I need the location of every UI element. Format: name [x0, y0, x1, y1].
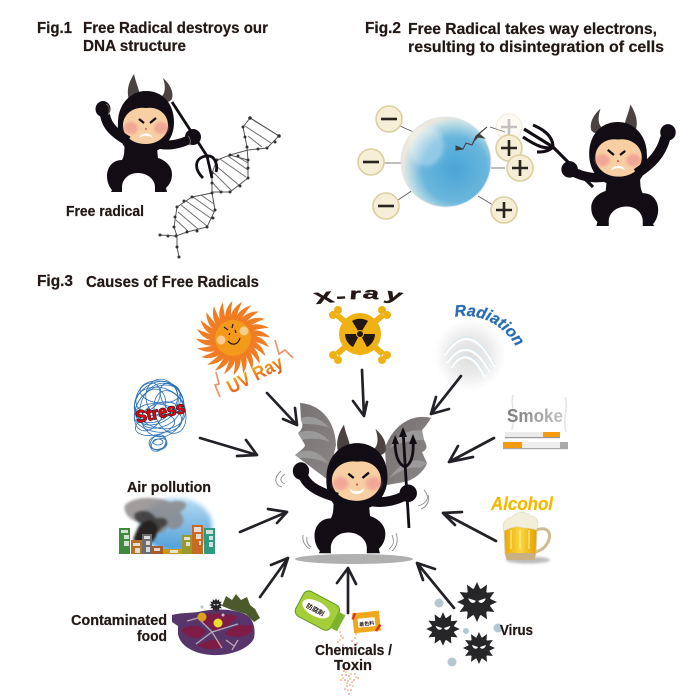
arrow: stress to devil — [200, 438, 257, 456]
label: Stress: Stress — [134, 398, 187, 427]
arrow: alcohol to devil — [443, 512, 496, 541]
motion lines — [276, 471, 429, 551]
heading: Fig.2 — [365, 20, 664, 56]
preservative bottle: 防腐剤 — [305, 601, 327, 618]
cell crack — [456, 127, 487, 150]
negative charges — [358, 106, 402, 219]
icon: chemicals — [293, 589, 392, 695]
heading: Fig.2: Free Radical takes way electrons, — [408, 21, 657, 38]
label: UV Ray: UV Ray — [224, 352, 287, 398]
arrow: food to devil — [260, 558, 288, 597]
shadow — [295, 554, 413, 564]
additive sachet: 着色料 — [359, 620, 375, 628]
icon: UV sun — [196, 301, 293, 398]
arrow: chemicals to devil — [337, 568, 356, 613]
label: Contaminated food — [71, 613, 167, 645]
character: central winged devil — [276, 403, 431, 564]
heading: Fig.2: Fig.2 — [365, 20, 401, 37]
label: Smoke: Smoke — [507, 405, 563, 426]
heading: Fig.1: DNA structure — [83, 38, 186, 55]
heading: Fig.3: Causes of Free Radicals — [86, 274, 259, 291]
icon: stress scribble — [126, 373, 192, 454]
contaminant microbes — [197, 598, 224, 628]
diagram: cell with electrons — [358, 106, 533, 223]
label: Chemicals / Toxin: Chemicals / — [315, 643, 392, 659]
smoke clouds — [125, 498, 186, 544]
icon: air pollution city — [119, 480, 215, 554]
label: Air pollution: Air pollution — [127, 480, 211, 496]
lightning bolts — [215, 340, 293, 397]
arrow: air pollution to devil — [240, 509, 287, 532]
heading: Fig.2: resulting to disintegration of cells — [408, 39, 664, 56]
character: devil stealing electron — [523, 105, 676, 226]
arrow: UV to devil — [267, 393, 297, 425]
crossbones — [337, 315, 383, 354]
arrow: X-ray to devil — [353, 370, 367, 416]
arrow: virus to devil — [417, 563, 454, 608]
label: Contaminated food: Contaminated — [71, 613, 167, 629]
wings — [295, 403, 431, 485]
label: Contaminated food: food — [137, 629, 167, 645]
label: Virus: Virus — [500, 623, 533, 639]
chart: DNA double helix — [158, 116, 281, 258]
icon: contaminated meat — [172, 594, 260, 655]
fading electron — [496, 114, 522, 140]
label: Chemicals / Toxin — [315, 643, 392, 674]
heading: Fig.1: Free Radical destroys our — [83, 20, 268, 37]
falling powder — [337, 631, 359, 695]
label: free radical: Free radical — [66, 204, 144, 220]
icon: X-ray radiation symbol — [312, 284, 406, 364]
label: Chemicals / Toxin: Toxin — [334, 658, 372, 674]
positive charges — [491, 135, 533, 223]
label: Alcohol: Alcohol — [490, 494, 554, 514]
icon: beer mug — [490, 494, 554, 564]
trident — [395, 430, 413, 528]
label: Radiation: Radiation — [455, 304, 523, 346]
character: devil with trident on DNA — [96, 74, 217, 192]
heading: Fig.3: Fig.3 — [37, 273, 73, 290]
heading: Fig.1: Fig.1 — [37, 20, 72, 37]
label: X-ray: X-ray — [312, 284, 406, 307]
icon: viruses — [426, 582, 533, 666]
icon: radiation waves — [441, 304, 523, 384]
buildings — [119, 525, 215, 554]
heading: Fig.1 — [37, 20, 268, 55]
arrow: radiation to devil — [431, 376, 461, 414]
icon: cigarettes — [503, 395, 568, 449]
arrow: smoke to devil — [449, 438, 494, 462]
